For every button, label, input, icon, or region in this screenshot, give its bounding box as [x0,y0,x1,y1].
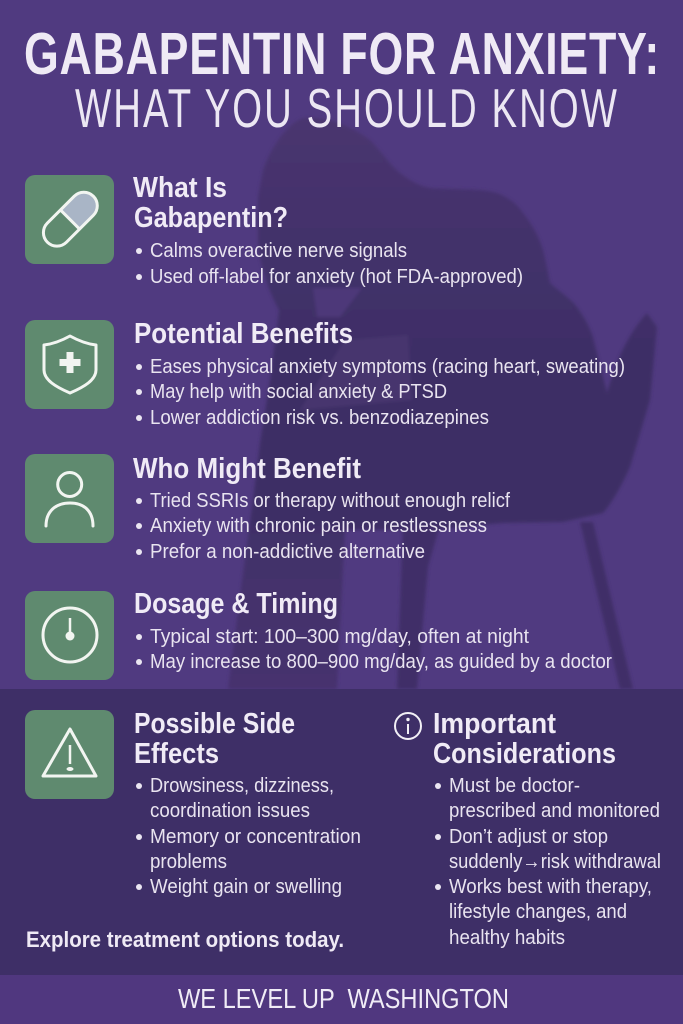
bullet list: what is gabapentin: Used off-label for anxiety (hot FDA-approved) [150,265,523,288]
bullet list: who might benefit: Tried SSRIs or therapy without enough relicf [150,489,510,512]
panel: dosage and timing [25,588,612,680]
bullet list: potential benefits: Lower addiction risk vs. benzodiazepines [150,406,489,429]
bullet list: possible side effects: Weight gain or swelling [150,875,342,898]
bullet list: what is gabapentin [136,239,523,288]
icon: shield with plus [25,320,114,409]
bullet list: important considerations: Must be doctor- [449,774,580,797]
icon: person [25,454,114,543]
panel: possible side effects [25,708,361,898]
heading: what is gabapentin [133,172,288,234]
bullet list: who might benefit [136,489,510,563]
bullet list: possible side effects [136,774,361,898]
bullet list: important considerations: Works best with therapy, [449,875,652,898]
icon: warning triangle [25,710,114,799]
heading: possible side effects [134,708,295,770]
lower dark panel [0,689,683,975]
heading: what is gabapentin: Gabapentin? [134,202,288,234]
panel: what is gabapentin [25,172,523,288]
heading: possible side effects: Effects [134,738,219,770]
bullet list: important considerations: suddenly→risk withdrawal [449,850,661,873]
bullet list: potential benefits: May help with social anxiety & PTSD [150,380,447,403]
heading: dosage and timing: Dosage & Timing [134,588,338,620]
bullet list: important considerations: healthy habits [449,926,565,949]
bullet list: who might benefit: Anxiety with chronic pain or restlessness [150,514,487,537]
panel: who might benefit [25,453,510,563]
heading: potential benefits: Potential Benefits [134,318,353,350]
icon: clock [25,591,114,680]
bullet list: potential benefits [136,355,625,429]
bullet list: dosage and timing: Typical start: 100–300 mg/day, often at night [150,625,529,648]
bullet list: important considerations: prescribed and monitored [449,799,660,822]
icon: capsule [25,175,114,264]
bullet list: possible side effects: coordination issues [150,799,310,822]
bullet list: who might benefit: Prefor a non-addictive alternative [150,540,425,563]
call to action: Explore treatment options today. [26,927,344,952]
heading: what is gabapentin: What Is [133,172,227,204]
bullet list: dosage and timing: May increase to 800–900 mg/day, as guided by a doctor [150,650,612,673]
footer bar [0,975,683,1024]
footer text: WE LEVEL UP WASHINGTON [178,983,509,1014]
bullet list: important considerations: lifestyle changes, and [449,900,627,923]
heading: who might benefit: Who Might Benefit [133,453,361,485]
bullet list: possible side effects: problems [150,850,227,873]
heading: important considerations: Important [433,708,556,740]
heading: possible side effects: Possible Side [134,708,295,740]
bullet list: important considerations [435,774,661,949]
heading: important considerations: Considerations [433,738,616,770]
bullet list: potential benefits: Eases physical anxiety symptoms (racing heart, sweating) [150,355,625,378]
panel: important considerations [395,708,661,949]
bullet list: what is gabapentin: Calms overactive nerve signals [150,239,407,262]
bullet list: possible side effects: Drowsiness, dizziness, [150,774,334,797]
panel: potential benefits [25,318,625,429]
heading: important considerations [433,708,616,770]
icon: info circle [395,713,421,739]
bullet list: possible side effects: Memory or concentration [150,825,361,848]
bullet list: dosage and timing [136,625,612,673]
bullet list: important considerations: Don’t adjust or stop [449,825,608,848]
background silhouette: person seated on a chair [228,118,657,689]
title [24,21,660,139]
